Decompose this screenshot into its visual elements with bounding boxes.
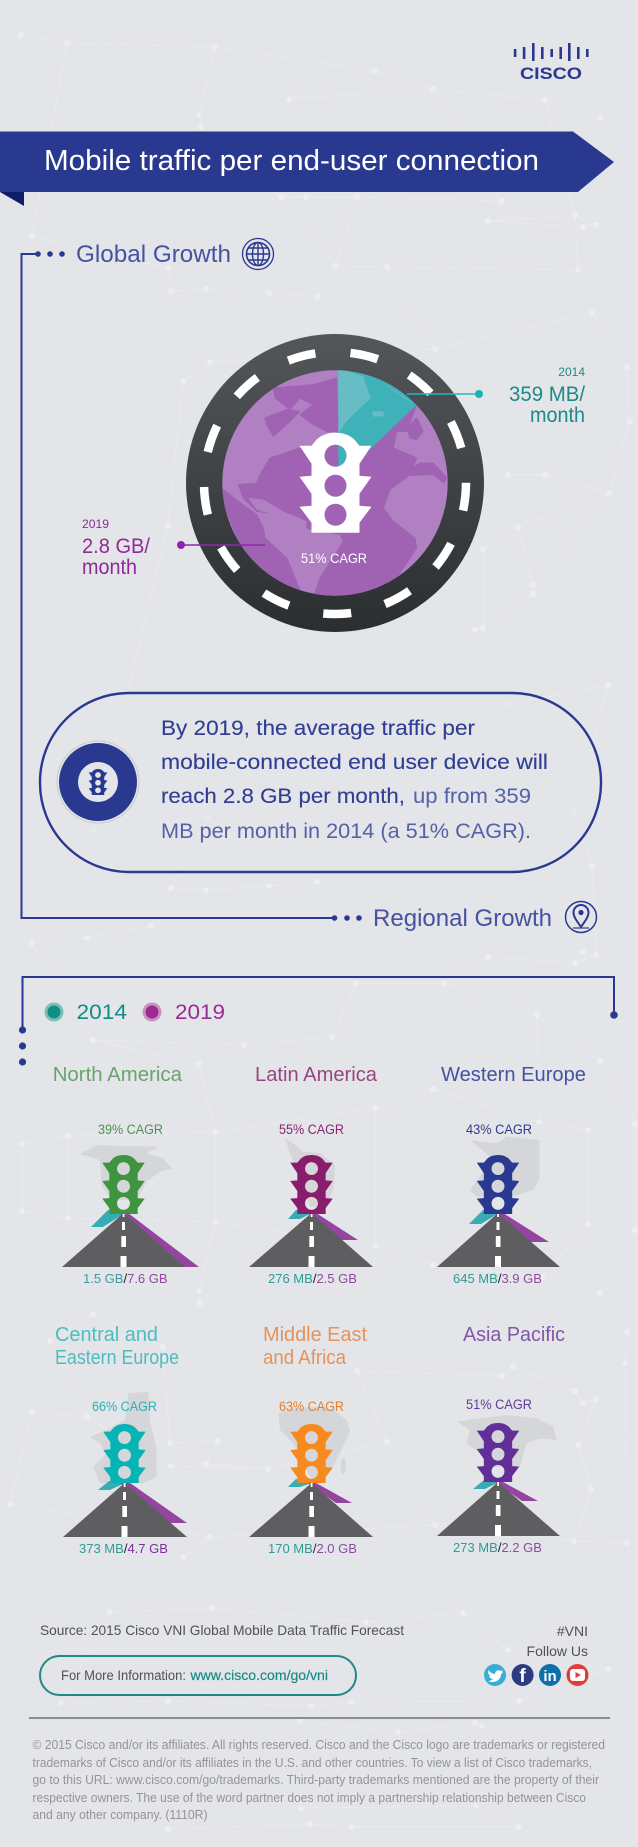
panel: key statement pill: [40, 693, 601, 872]
map: [470, 1137, 539, 1197]
CAGR text: 51% CAGR: [301, 551, 367, 566]
panel: Middle East and Africa: Middle East: [263, 1323, 367, 1346]
legal text: go to this URL: www.cisco.com/go/trademarks. Third-party trademarks mentioned are the property of their: [32, 1772, 600, 1787]
panel: Latin America: [249, 1063, 378, 1286]
legal text: and any other company. (1110R): [32, 1807, 208, 1822]
chart: global road circle: [181, 334, 484, 632]
panel: North America: 1.5 GB: [83, 1271, 123, 1286]
title banner: Mobile traffic per end-user connection: [44, 145, 539, 177]
legend: [44, 1001, 225, 1024]
source text: Source: 2015 Cisco VNI Global Mobile Data Traffic Forecast: [40, 1622, 404, 1638]
panel: Middle East and Africa: [249, 1323, 373, 1556]
panel: Western Europe: 43% CAGR: [466, 1122, 532, 1137]
title banner: [0, 132, 614, 206]
panel: Middle East and Africa: and Africa: [263, 1346, 347, 1369]
map: [90, 1392, 157, 1483]
callout 2019 value: 2019: [82, 517, 109, 531]
panel: Central and Eastern Europe: Eastern Europe: [55, 1346, 179, 1369]
legal text: respective owners. The use of the word partner does not imply a partnership relationship between Cisco: [32, 1790, 586, 1805]
statement text: reach 2.8 GB per month,: [161, 785, 405, 808]
social tags: [527, 1623, 588, 1659]
icon: large traffic light: [300, 433, 372, 533]
panel: Western Europe: 645 MB: [453, 1271, 498, 1286]
panel: Asia Pacific: 273 MB: [453, 1540, 498, 1555]
panel: Middle East and Africa: /2.0 GB: [313, 1541, 357, 1556]
statement text: MB per month in 2014 (a 51% CAGR).: [161, 820, 531, 843]
panel: North America: 39% CAGR: [98, 1122, 163, 1137]
panel: Latin America: /2.5 GB: [313, 1271, 357, 1286]
icon: youtube: [566, 1664, 588, 1686]
callout 2014 value: 2014: [558, 365, 585, 379]
panel: Asia Pacific: [437, 1323, 565, 1555]
panel: Central and Eastern Europe: [55, 1323, 187, 1556]
social tags: #VNI: [557, 1623, 588, 1639]
road ring: [186, 334, 484, 632]
panel: Asia Pacific: Asia Pacific: [463, 1323, 565, 1346]
icon: globe: [242, 238, 274, 270]
panel: Middle East and Africa: 63% CAGR: [279, 1399, 344, 1414]
leader line 2014: [407, 393, 479, 395]
callout 2019 value: [82, 517, 185, 579]
road dashes: [189, 337, 481, 629]
heading: Regional Growth: Regional Growth: [373, 905, 552, 932]
panel: Asia Pacific: /2.2 GB: [498, 1540, 542, 1555]
panel: Central and Eastern Europe: 66% CAGR: [92, 1399, 157, 1414]
panel: Western Europe: Western Europe: [441, 1063, 586, 1086]
more information pill: www.cisco.com/go/vni: [189, 1668, 328, 1683]
panel: Latin America: 276 MB: [268, 1271, 313, 1286]
panel: Middle East and Africa: 170 MB: [268, 1541, 313, 1556]
statement text: up from 359: [413, 785, 531, 808]
map: [457, 1415, 557, 1467]
statement text: [161, 717, 548, 843]
heading: Global Growth: Global Growth: [76, 241, 231, 268]
icon: facebook: [512, 1664, 534, 1687]
icon: facebook: f: [519, 1666, 526, 1687]
map: [285, 1138, 335, 1207]
icon: location pin: [566, 902, 596, 932]
icon: traffic light badge: [57, 741, 139, 823]
more information pill: [40, 1656, 356, 1695]
connector bracket: regional section: [19, 977, 618, 1066]
Cisco logo: [514, 43, 589, 83]
legend: 2019: [175, 1001, 225, 1024]
Cisco logo: CISCO: [520, 64, 582, 83]
divider: [29, 1717, 610, 1719]
panel: North America: North America: [53, 1063, 183, 1086]
panel: Western Europe: [437, 1063, 586, 1286]
callout 2019 value: 2.8 GB/: [82, 535, 150, 558]
callout 2019 value: month: [82, 556, 137, 579]
more information pill: For More Information:: [61, 1668, 186, 1683]
leader line 2019: [181, 544, 265, 546]
map: [278, 1407, 350, 1483]
panel: Asia Pacific: 51% CAGR: [466, 1397, 532, 1412]
legend: 2014: [76, 1001, 127, 1024]
panel: Latin America: Latin America: [255, 1063, 378, 1086]
panel: Central and Eastern Europe: 373 MB: [79, 1541, 124, 1556]
panel: North America: [53, 1063, 199, 1286]
icon: linkedin: in: [543, 1668, 557, 1685]
legal text: © 2015 Cisco and/or its affiliates. All rights reserved. Cisco and the Cisco logo are trademarks or registered: [32, 1737, 605, 1752]
map: [80, 1145, 172, 1200]
legal text: trademarks of Cisco and/or its affiliates in the U.S. and other countries. To view a list of Cisco trademarks,: [32, 1755, 592, 1770]
legal text: [32, 1737, 605, 1822]
globe: [222, 368, 448, 598]
icon: twitter: [484, 1664, 506, 1686]
callout 2014 value: 359 MB/: [509, 383, 585, 406]
panel: Central and Eastern Europe: /4.7 GB: [124, 1541, 168, 1556]
callout 2014 value: month: [530, 404, 585, 427]
statement text: By 2019, the average traffic per: [161, 717, 475, 740]
connector line: global to regional: [22, 251, 362, 921]
panel: Central and Eastern Europe: Central and: [55, 1323, 158, 1346]
statement text: mobile-connected end user device will: [161, 751, 548, 774]
icon: linkedin: [539, 1664, 561, 1686]
social tags: Follow Us: [527, 1643, 588, 1659]
panel: Western Europe: /3.9 GB: [498, 1271, 542, 1286]
panel: North America: /7.6 GB: [123, 1271, 168, 1286]
callout 2014 value: [475, 365, 585, 427]
panel: Latin America: 55% CAGR: [279, 1122, 344, 1137]
